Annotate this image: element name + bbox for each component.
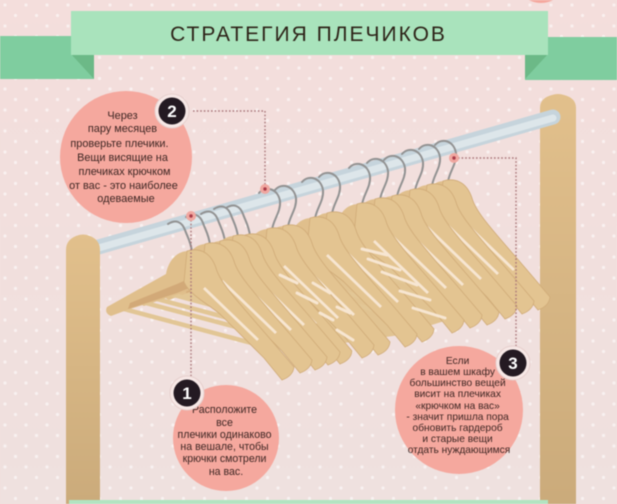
- title: СТРАТЕГИЯ ПЛЕЧИКОВ: [170, 23, 447, 46]
- pale gaps between arms: [280, 249, 445, 340]
- callout 3: [395, 346, 523, 474]
- callout 2 text: плечиках крючком: [78, 166, 171, 178]
- callout 1 text: крючки смотрели: [183, 453, 267, 465]
- left post: [66, 234, 100, 504]
- callout 3 text: обновить гардероб: [413, 422, 503, 434]
- callout 2: [60, 91, 192, 223]
- callout 2 text: пару месяцев: [88, 123, 157, 135]
- hanger hooks: [168, 141, 456, 252]
- callout 1: [173, 385, 279, 491]
- callout 3 text: большинство вещей: [409, 377, 506, 389]
- callout 3 text: и старые вещи: [422, 434, 493, 445]
- badge 1: 1: [182, 384, 192, 403]
- callout 2 text: одеваемые: [97, 193, 155, 205]
- callout 1 text: Расположите: [192, 404, 257, 416]
- right post: [540, 94, 576, 504]
- callout 2 text: Через: [107, 110, 138, 122]
- hanger mass backing: [200, 222, 495, 350]
- title ribbon: [0, 11, 617, 80]
- top pink circle fragment: [515, 0, 567, 3]
- clothes rail: [95, 117, 553, 249]
- callout 1 text: на вешале, чтобы: [180, 441, 269, 453]
- callout 2 text: Вещи висящие на: [77, 152, 169, 164]
- bottom green band: [69, 500, 548, 504]
- wooden hangers: [106, 180, 550, 380]
- callout 2 text: от вас - это наиболее: [69, 180, 178, 192]
- callout 3 text: висит на плечиках: [414, 389, 501, 400]
- callout 3 text: в вашем шкафу: [420, 366, 496, 378]
- badge 3: [496, 346, 530, 380]
- badge 2: 2: [167, 102, 177, 121]
- badge 3: 3: [508, 354, 518, 373]
- badge 1: [170, 376, 204, 410]
- callout 3 text: - значит пришла пора: [406, 412, 509, 423]
- callout 1 text: на вас.: [209, 466, 243, 478]
- dotted leader lines: [191, 111, 516, 376]
- callout 2 text: проверьте плечики.: [70, 138, 169, 150]
- hook markers: [186, 153, 459, 221]
- callout 3 text: «крючком на вас»: [415, 401, 500, 412]
- callout 1 text: все: [216, 417, 233, 429]
- callout 3 text: отдать нуждающимся: [408, 445, 510, 456]
- callout 1 text: плечики одинаково: [178, 429, 272, 441]
- callout 3 text: Если: [446, 356, 469, 367]
- badge 2: [155, 94, 189, 128]
